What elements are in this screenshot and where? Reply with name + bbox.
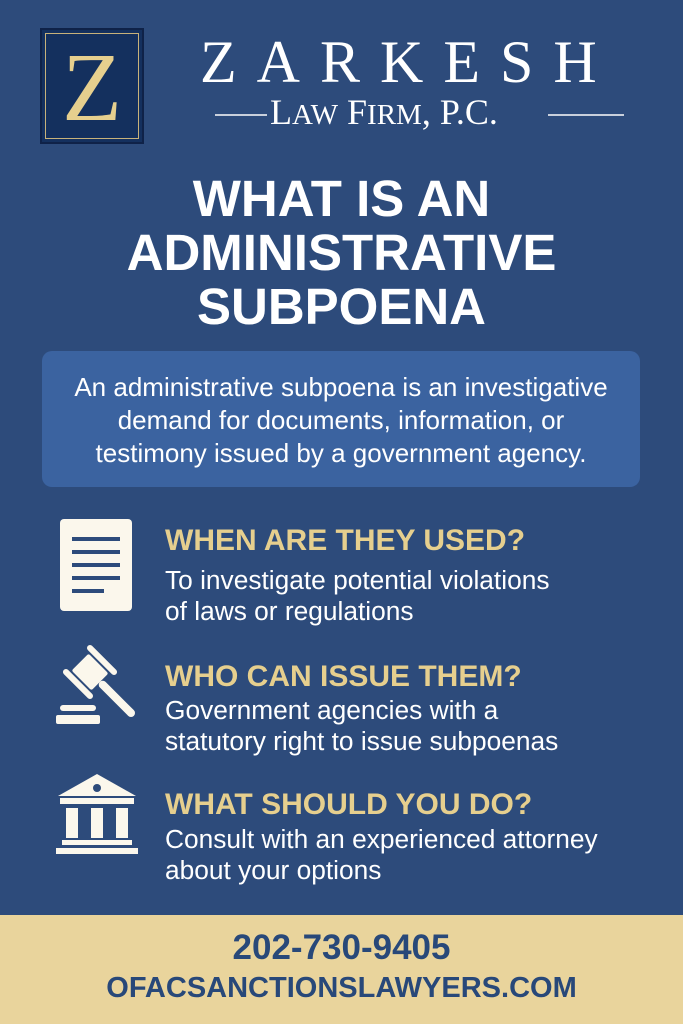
section: when [165, 524, 549, 626]
section: what: about your options [165, 855, 381, 885]
title: SUBPOENA [197, 278, 486, 335]
section: who: statutory right to issue subpoenas [165, 726, 558, 756]
firm name: LAW FIRM, P.C. [270, 92, 498, 132]
title: ADMINISTRATIVE [127, 224, 556, 281]
title: WHAT IS AN [193, 170, 490, 227]
title [127, 170, 556, 335]
section: what [165, 788, 598, 885]
section: when: To investigate potential violations [165, 565, 549, 595]
definition box: An administrative subpoena is an investigative [74, 372, 608, 402]
section: when: WHEN ARE THEY USED? [165, 524, 525, 557]
footer contact [0, 915, 683, 1024]
definition box: testimony issued by a government agency. [96, 438, 586, 468]
section: who [165, 660, 558, 756]
icon: gavel [56, 645, 135, 724]
firm name [200, 29, 624, 132]
icon: courthouse [56, 774, 138, 854]
footer contact: 202-730-9405 [233, 928, 450, 967]
icon: document [60, 519, 132, 611]
section: who: WHO CAN ISSUE THEM? [165, 660, 522, 693]
definition box [42, 351, 640, 487]
section: what: Consult with an experienced attorney [165, 824, 598, 854]
logo mark: Z [62, 34, 122, 142]
section: when: of laws or regulations [165, 596, 414, 626]
definition box: demand for documents, information, or [118, 405, 564, 435]
section: who: Government agencies with a [165, 695, 498, 725]
footer contact: OFACSANCTIONSLAWYERS.COM [106, 972, 577, 1004]
section: what: WHAT SHOULD YOU DO? [165, 788, 532, 821]
logo mark [40, 28, 144, 144]
firm name: ZARKESH [200, 29, 617, 95]
